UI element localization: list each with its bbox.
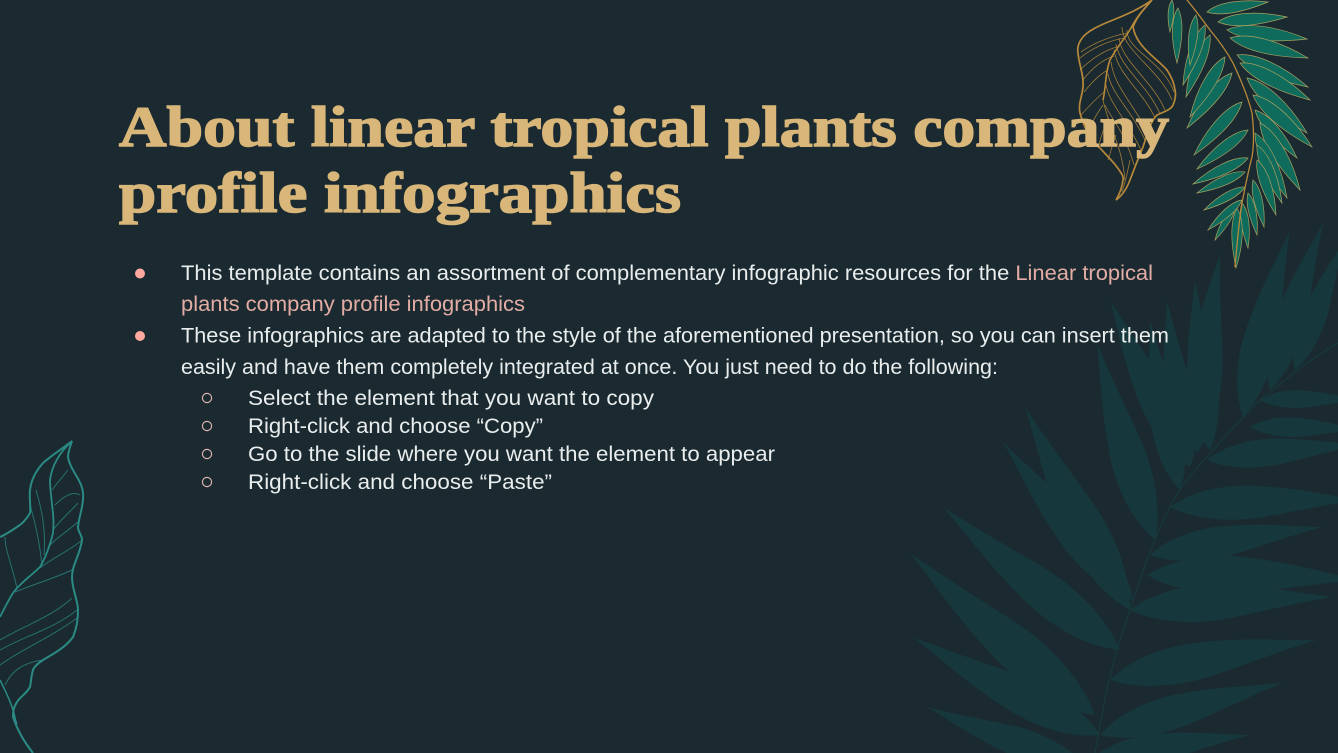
bullet point 2: These infographics are adapted to the style of the aforementioned presentation, so you can insert them bbox=[181, 324, 1169, 348]
bullet point 2 bbox=[135, 324, 1169, 379]
teal outline leaf, bottom left bbox=[0, 441, 83, 753]
title: profile infographics bbox=[119, 162, 681, 225]
bullet point 2: easily and have them completely integrated at once. You just need to do the following: bbox=[181, 356, 998, 379]
title bbox=[119, 96, 1169, 225]
bullet point 1: plants company profile infographics bbox=[181, 293, 525, 316]
dark palm leaf, bottom right bbox=[894, 218, 1338, 753]
gold outline leaf, top right bbox=[1078, 0, 1176, 200]
step 1: Select the element that you want to copy bbox=[248, 387, 655, 410]
bullet point 1 bbox=[135, 262, 1153, 316]
sub-list: steps bbox=[202, 387, 775, 494]
bullet point 1: This template contains an assortment of complementary infographic resources for the Linear tropical bbox=[181, 262, 1153, 285]
title: About linear tropical plants company bbox=[119, 96, 1169, 159]
step 2: Right-click and choose “Copy” bbox=[248, 415, 543, 438]
bullet list: intro bbox=[135, 262, 1169, 379]
green palm leaf, top right bbox=[1167, 0, 1317, 268]
step 4: Right-click and choose “Paste” bbox=[248, 471, 552, 494]
step 3: Go to the slide where you want the element to appear bbox=[248, 443, 775, 466]
